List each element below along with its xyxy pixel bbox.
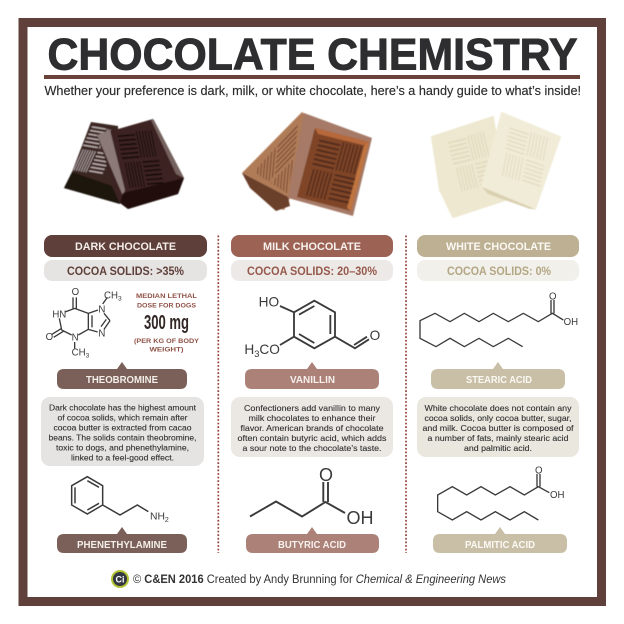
cocoa solids: milk: COCOA SOLIDS: 20–30% — [247, 266, 377, 278]
cocoa solids: dark: COCOA SOLIDS: >35% — [67, 266, 184, 278]
callout: median lethal dose — [134, 293, 199, 354]
molecule: butyric acid: O — [319, 465, 333, 485]
image: dark chocolate pieces — [64, 119, 184, 209]
text block: white chocolate: White chocolate does not contain any — [424, 403, 572, 413]
header: white chocolate — [417, 235, 579, 257]
callout: median lethal dose: DOSE FOR DOGS — [137, 302, 196, 310]
text block: dark chocolate: beans. The solids contain theobromine, — [48, 432, 196, 442]
molecule: theobromine: CH — [104, 291, 118, 302]
text block: white chocolate — [417, 397, 579, 457]
header: dark chocolate: DARK CHOCOLATE — [75, 241, 176, 253]
molecule: theobromine: N — [98, 329, 105, 340]
label: vanillin: VANILLIN — [290, 375, 335, 386]
subtitle: Whether your preference is dark, milk, or white chocolate, here’s a handy guide to what’s inside! — [44, 84, 581, 98]
molecule: theobromine: O — [46, 332, 54, 343]
callout: median lethal dose: MEDIAN LETHAL — [136, 293, 197, 300]
panel: white chocolate — [417, 235, 579, 553]
text block: dark chocolate: Dark chocolate has the highest amount — [49, 402, 197, 412]
label: butyric acid — [246, 527, 379, 553]
molecule: vanillin — [244, 295, 380, 359]
text block: dark chocolate: cocoa butter is extracted from cacao — [54, 422, 192, 432]
title rule — [44, 75, 580, 79]
icon: compound interest logo — [111, 570, 129, 588]
molecule: theobromine — [46, 287, 122, 359]
text block: dark chocolate: toxic to dogs, and phenethylamine, — [56, 442, 189, 452]
molecule: phenethylamine: 2 — [165, 517, 169, 524]
text block: milk chocolate: often contain butyric acid, which adds — [238, 433, 386, 443]
molecule: theobromine: N — [72, 333, 79, 344]
molecule: theobromine: O — [72, 287, 80, 298]
icon: compound interest logo: Ci — [116, 574, 124, 584]
molecule: stearic acid: OH — [564, 317, 578, 328]
label: vanillin — [245, 362, 379, 389]
header: milk chocolate — [231, 235, 393, 257]
molecule: palmitic acid: OH — [550, 490, 565, 501]
text block: milk chocolate: Confectioners add vanillin to many — [244, 403, 381, 413]
text block: white chocolate: and milk. Cocoa butter is composed of — [422, 423, 574, 433]
text block: milk chocolate — [231, 397, 393, 457]
cocoa solids: white: COCOA SOLIDS: 0% — [447, 266, 551, 278]
text block: milk chocolate: a sour note to the chocolate’s taste. — [242, 443, 382, 453]
molecule: vanillin: 3 — [254, 349, 259, 359]
text block: white chocolate: and palmitic acid. — [464, 443, 532, 453]
label: stearic acid — [431, 362, 565, 389]
molecule: phenethylamine — [72, 477, 169, 524]
label: palmitic acid — [433, 527, 567, 553]
column divider: left — [217, 236, 219, 553]
title: CHOCOLATE CHEMISTRY — [48, 30, 578, 79]
molecule: butyric acid — [250, 465, 374, 528]
text block: milk chocolate: milk chocolates to enhance their — [248, 413, 376, 423]
header: white chocolate: WHITE CHOCOLATE — [446, 241, 551, 253]
molecule: vanillin: CO — [259, 342, 280, 357]
text block: dark chocolate — [41, 397, 204, 466]
molecule: vanillin: O — [370, 328, 380, 343]
label: theobromine: THEOBROMINE — [86, 375, 158, 386]
molecule: stearic acid — [420, 291, 578, 347]
callout: median lethal dose: 300 mg — [144, 312, 189, 334]
label: theobromine — [57, 362, 187, 389]
molecule: theobromine: 3 — [86, 352, 90, 359]
callout: median lethal dose: WEIGHT) — [150, 346, 184, 354]
image: milk chocolate pieces — [242, 112, 372, 216]
molecule: theobromine: HN — [52, 310, 66, 321]
molecule: theobromine: CH — [72, 347, 86, 358]
cocoa solids: white — [417, 260, 579, 281]
label: phenethylamine — [57, 527, 187, 553]
molecule: stearic acid: O — [549, 291, 557, 302]
label: butyric acid: BUTYRIC ACID — [278, 540, 346, 551]
text block: dark chocolate: linked to a feel-good effect. — [71, 452, 174, 462]
header: milk chocolate: MILK CHOCOLATE — [263, 241, 361, 253]
cocoa solids: dark — [44, 260, 207, 281]
column divider: right — [405, 236, 407, 553]
label: palmitic acid: PALMITIC ACID — [465, 540, 535, 551]
panel: milk chocolate — [231, 235, 393, 553]
molecule: phenethylamine: NH — [150, 511, 165, 522]
label: phenethylamine: PHENETHYLAMINE — [77, 540, 167, 551]
molecule: palmitic acid: O — [535, 465, 543, 476]
cocoa solids: milk — [231, 260, 393, 281]
molecule: butyric acid: OH — [346, 508, 374, 528]
image: white chocolate pieces — [432, 113, 560, 217]
text block: dark chocolate: of cocoa solids, which remain after — [58, 412, 188, 422]
text block: white chocolate: cocoa solids, only cocoa butter, sugar, — [424, 413, 572, 423]
panel: dark chocolate — [41, 235, 207, 553]
molecule: vanillin: HO — [259, 295, 279, 310]
text block: milk chocolate: flavor. American brands of chocolate — [240, 423, 384, 433]
molecule: theobromine: N — [98, 304, 105, 315]
header: dark chocolate — [44, 235, 207, 257]
molecule: theobromine: 3 — [118, 296, 122, 303]
molecule: palmitic acid — [438, 465, 565, 520]
text block: white chocolate: a number of fats, mainly stearic acid — [428, 433, 569, 443]
footer credit: © C&EN 2016 Created by Andy Brunning for Chemical & Engineering News — [133, 574, 506, 586]
callout: median lethal dose: (PER KG OF BODY — [134, 338, 199, 345]
molecule: vanillin: H — [244, 342, 254, 357]
label: stearic acid: STEARIC ACID — [466, 375, 532, 386]
